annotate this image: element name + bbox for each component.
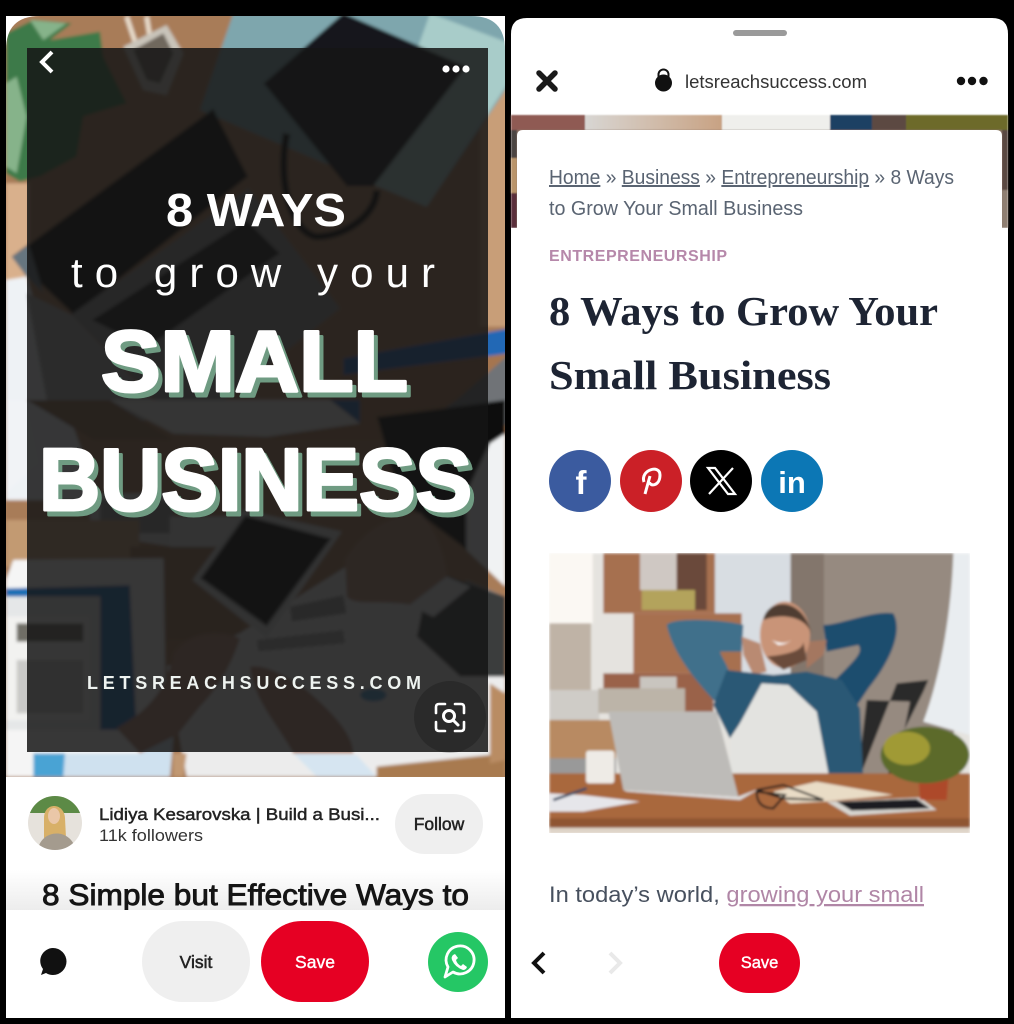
icon: more dots (957, 77, 988, 85)
article title (549, 288, 938, 398)
panel: Pinterest pin screen (0, 0, 510, 1018)
icon: close X (539, 73, 555, 89)
sheet handle (733, 30, 787, 36)
intro text: In today’s world, growing your small (549, 882, 924, 907)
panel: in-app browser screen (511, 18, 1008, 1018)
gradient under title (6, 870, 505, 911)
category label: ENTREPRENEURSHIP (549, 248, 727, 265)
social share: Facebook: f (576, 464, 588, 501)
heading: SMALL with shadow: SMALL (101, 314, 408, 410)
button: Save (719, 933, 800, 993)
article photo: smiling man at laptop (549, 553, 970, 833)
article header photo strip (511, 115, 1008, 228)
icon: WhatsApp (428, 932, 488, 992)
dark text overlay rectangle (27, 48, 488, 752)
social share: LinkedIn: in (778, 465, 806, 500)
button: Save: Save (741, 954, 778, 972)
icon: forward chevron disabled (610, 953, 620, 973)
button: Visit: Visit (180, 952, 213, 972)
heading: to grow your: to grow your (71, 249, 435, 296)
icon: back chevron (534, 953, 544, 973)
browser toolbar (511, 923, 1008, 1018)
icon: back chevron (42, 52, 52, 72)
article card (517, 130, 1002, 232)
pin title: 8 Simple but Effective Ways to (42, 879, 469, 912)
article body background (511, 228, 1008, 923)
icon: lock (655, 70, 672, 92)
icon: visual search (436, 704, 464, 731)
button: Save (261, 921, 369, 1002)
site address: letsreachsuccess.com (685, 72, 867, 92)
social share: LinkedIn (761, 450, 823, 512)
website caption: LETSREACHSUCCESS.COM (87, 673, 421, 693)
zoom lens backdrop (414, 681, 486, 753)
breadcrumb: to Grow Your Small Business (549, 198, 803, 220)
follower count: 11k followers (99, 826, 203, 845)
social share: X (690, 450, 752, 512)
button: Follow (395, 794, 483, 854)
article title: Small Business (549, 352, 831, 398)
heading: 8 WAYS: 8 WAYS (166, 184, 346, 236)
icon: comment bubble (40, 948, 66, 975)
button: Save: Save (295, 952, 335, 972)
author name: Lidiya Kesarovska | Build a Busi... (99, 805, 380, 824)
heading: BUSINESS with shadow: BUSINESS (39, 430, 472, 529)
heading: SMALL with shadow: SMALL (105, 319, 412, 415)
button: Visit (142, 921, 250, 1002)
button: Follow: Follow (414, 814, 465, 834)
social share: Facebook (549, 450, 611, 512)
breadcrumb (549, 167, 954, 220)
bottom action bar (6, 910, 505, 1018)
article title: 8 Ways to Grow Your (549, 288, 938, 334)
heading: BUSINESS with shadow: BUSINESS (43, 435, 476, 534)
icon: more dots (442, 65, 470, 73)
pin photo: overhead office desk (0, 0, 510, 780)
avatar: author portrait (28, 796, 82, 850)
social share: Pinterest (620, 450, 682, 512)
breadcrumb: Home » Business » Entrepreneurship » 8 Ways (549, 167, 954, 189)
